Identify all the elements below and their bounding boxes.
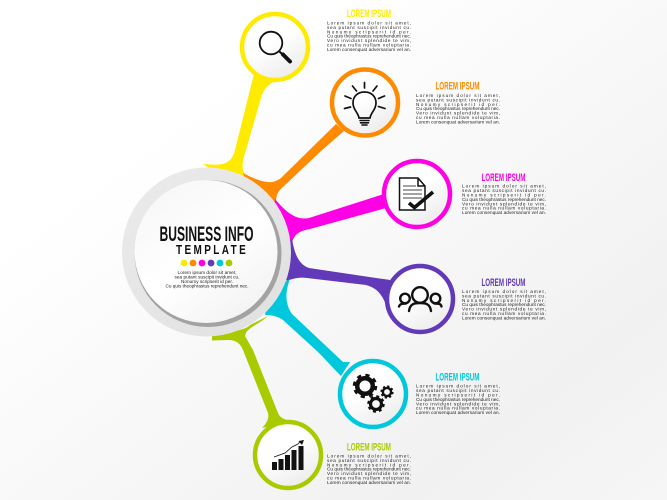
text block: yellow: Lorem ipsum dolor sit amet, <box>327 20 411 26</box>
icon: checked document <box>400 178 433 210</box>
heading: cyan: LOREM IPSUM <box>436 372 480 384</box>
text block: purple <box>462 289 546 320</box>
text block: magenta: Lorem consenquat adversarium vel an. <box>462 210 546 215</box>
heading: orange: LOREM IPSUM <box>436 80 480 92</box>
text block: orange: cu mea nulla nullam voluptaria. <box>416 115 500 120</box>
text block: lime: Cu quis theophrastus reprehendunt nec. <box>327 467 411 472</box>
heading: yellow: LOREM IPSUM <box>347 8 391 20</box>
text block: yellow: Vero invidunt splendide te vim, <box>327 38 411 43</box>
heading: magenta: LOREM IPSUM <box>482 172 526 184</box>
central text: Lorem ipsum dolor sit amet, <box>178 270 236 275</box>
connector: purple <box>270 239 390 307</box>
colour dots <box>181 260 232 266</box>
central text: sea putant suscipit invidunt cu. <box>174 274 240 280</box>
text block: purple: sea putant suscipit invidunt cu. <box>462 293 546 298</box>
text block: orange: Vero invidunt splendide te vim, <box>416 111 500 116</box>
subtitle: TEMPLATE <box>176 244 248 257</box>
text block: orange: Lorem consenquat adversarium vel an. <box>416 119 500 124</box>
node: orange idea <box>332 70 398 136</box>
node: magenta document <box>384 161 450 227</box>
icon: light bulb <box>344 82 385 125</box>
text block: magenta: Lorem ipsum dolor sit amet, <box>462 184 546 189</box>
text block: cyan: cu mea nulla nullam voluptaria. <box>416 406 500 411</box>
text block: purple: Vero invidunt splendide te vim, <box>462 307 546 312</box>
text block: yellow: sea putant suscipit invidunt cu. <box>327 25 411 30</box>
connector: orange <box>243 124 344 202</box>
connector: magenta <box>270 194 386 242</box>
connector: yellow <box>203 74 277 176</box>
text block: cyan: Vero invidunt splendide te vim, <box>416 401 500 406</box>
text block: orange: Cu quis theophrastus reprehendunt nec. <box>416 106 500 111</box>
text block: cyan: Cu quis theophrastus reprehendunt nec. <box>416 397 500 402</box>
text block: lime: Lorem consenquat adversarium vel an. <box>327 480 411 485</box>
node: purple team <box>387 266 453 332</box>
text block: cyan: Lorem consenquat adversarium vel an. <box>416 410 500 415</box>
text block: magenta: cu mea nulla nullam voluptaria. <box>462 206 546 211</box>
text block: magenta: Vero invidunt splendide te vim, <box>462 201 546 206</box>
icon: growth chart <box>272 440 304 470</box>
text block: lime: Nonumy scripserit id per. <box>327 462 411 467</box>
text block: orange <box>416 93 500 124</box>
text block: orange: sea putant suscipit invidunt cu. <box>416 97 500 102</box>
text block: cyan: sea putant suscipit invidunt cu. <box>416 388 500 393</box>
connector: cyan <box>265 279 350 376</box>
central text: Nonumy scripserit id per. <box>181 279 233 284</box>
text block: yellow <box>327 20 411 52</box>
text block: purple: Lorem ipsum dolor sit amet, <box>462 289 546 294</box>
node: yellow search <box>242 14 308 80</box>
text block: magenta: sea putant suscipit invidunt cu. <box>462 188 546 193</box>
heading: lime: LOREM IPSUM <box>347 442 391 454</box>
text block: lime: sea putant suscipit invidunt cu. <box>327 458 411 463</box>
icon: three people <box>399 287 442 311</box>
text block: cyan <box>416 384 500 415</box>
text block: yellow: cu mea nulla nullam voluptaria. <box>327 42 411 48</box>
text block: yellow: Nonumy scripserit id per. <box>327 29 411 34</box>
central text: Cu quis theophrastus reprehendunt nec. <box>166 284 248 288</box>
text block: yellow: Lorem consenquat adversarium vel an. <box>327 47 411 52</box>
central disc <box>122 168 291 336</box>
heading: purple: LOREM IPSUM <box>482 277 526 289</box>
main title: BUSINESS INFO <box>160 223 254 246</box>
icon: gears <box>354 376 393 412</box>
text block: purple: Cu quis theophrastus reprehendunt nec. <box>462 302 546 307</box>
text block: lime: cu mea nulla nullam voluptaria. <box>327 476 411 480</box>
text block: magenta: Nonumy scripserit id per. <box>462 192 546 198</box>
text block: orange: Lorem ipsum dolor sit amet, <box>416 93 500 98</box>
text block: magenta <box>462 184 546 215</box>
connector: lime <box>212 316 292 428</box>
text block: orange: Nonumy scripserit id per. <box>416 102 500 107</box>
central text <box>166 270 248 288</box>
node: lime growth <box>255 422 321 488</box>
text block: purple: Lorem consenquat adversarium vel an. <box>462 315 546 320</box>
text block: lime: Lorem ipsum dolor sit amet, <box>327 454 411 458</box>
text block: lime <box>327 454 411 485</box>
text block: purple: cu mea nulla nullam voluptaria. <box>462 311 546 316</box>
text block: lime: Vero invidunt splendide te vim, <box>327 471 411 476</box>
node: cyan gears <box>340 361 406 427</box>
text block: yellow: Cu quis theophrastus reprehendunt nec. <box>327 34 411 39</box>
text block: cyan: Nonumy scripserit id per. <box>416 392 500 398</box>
text block: purple: Nonumy scripserit id per. <box>462 298 546 303</box>
icon: magnifier <box>260 32 290 62</box>
text block: cyan: Lorem ipsum dolor sit amet, <box>416 384 500 389</box>
text block: magenta: Cu quis theophrastus reprehendunt nec. <box>462 197 546 202</box>
